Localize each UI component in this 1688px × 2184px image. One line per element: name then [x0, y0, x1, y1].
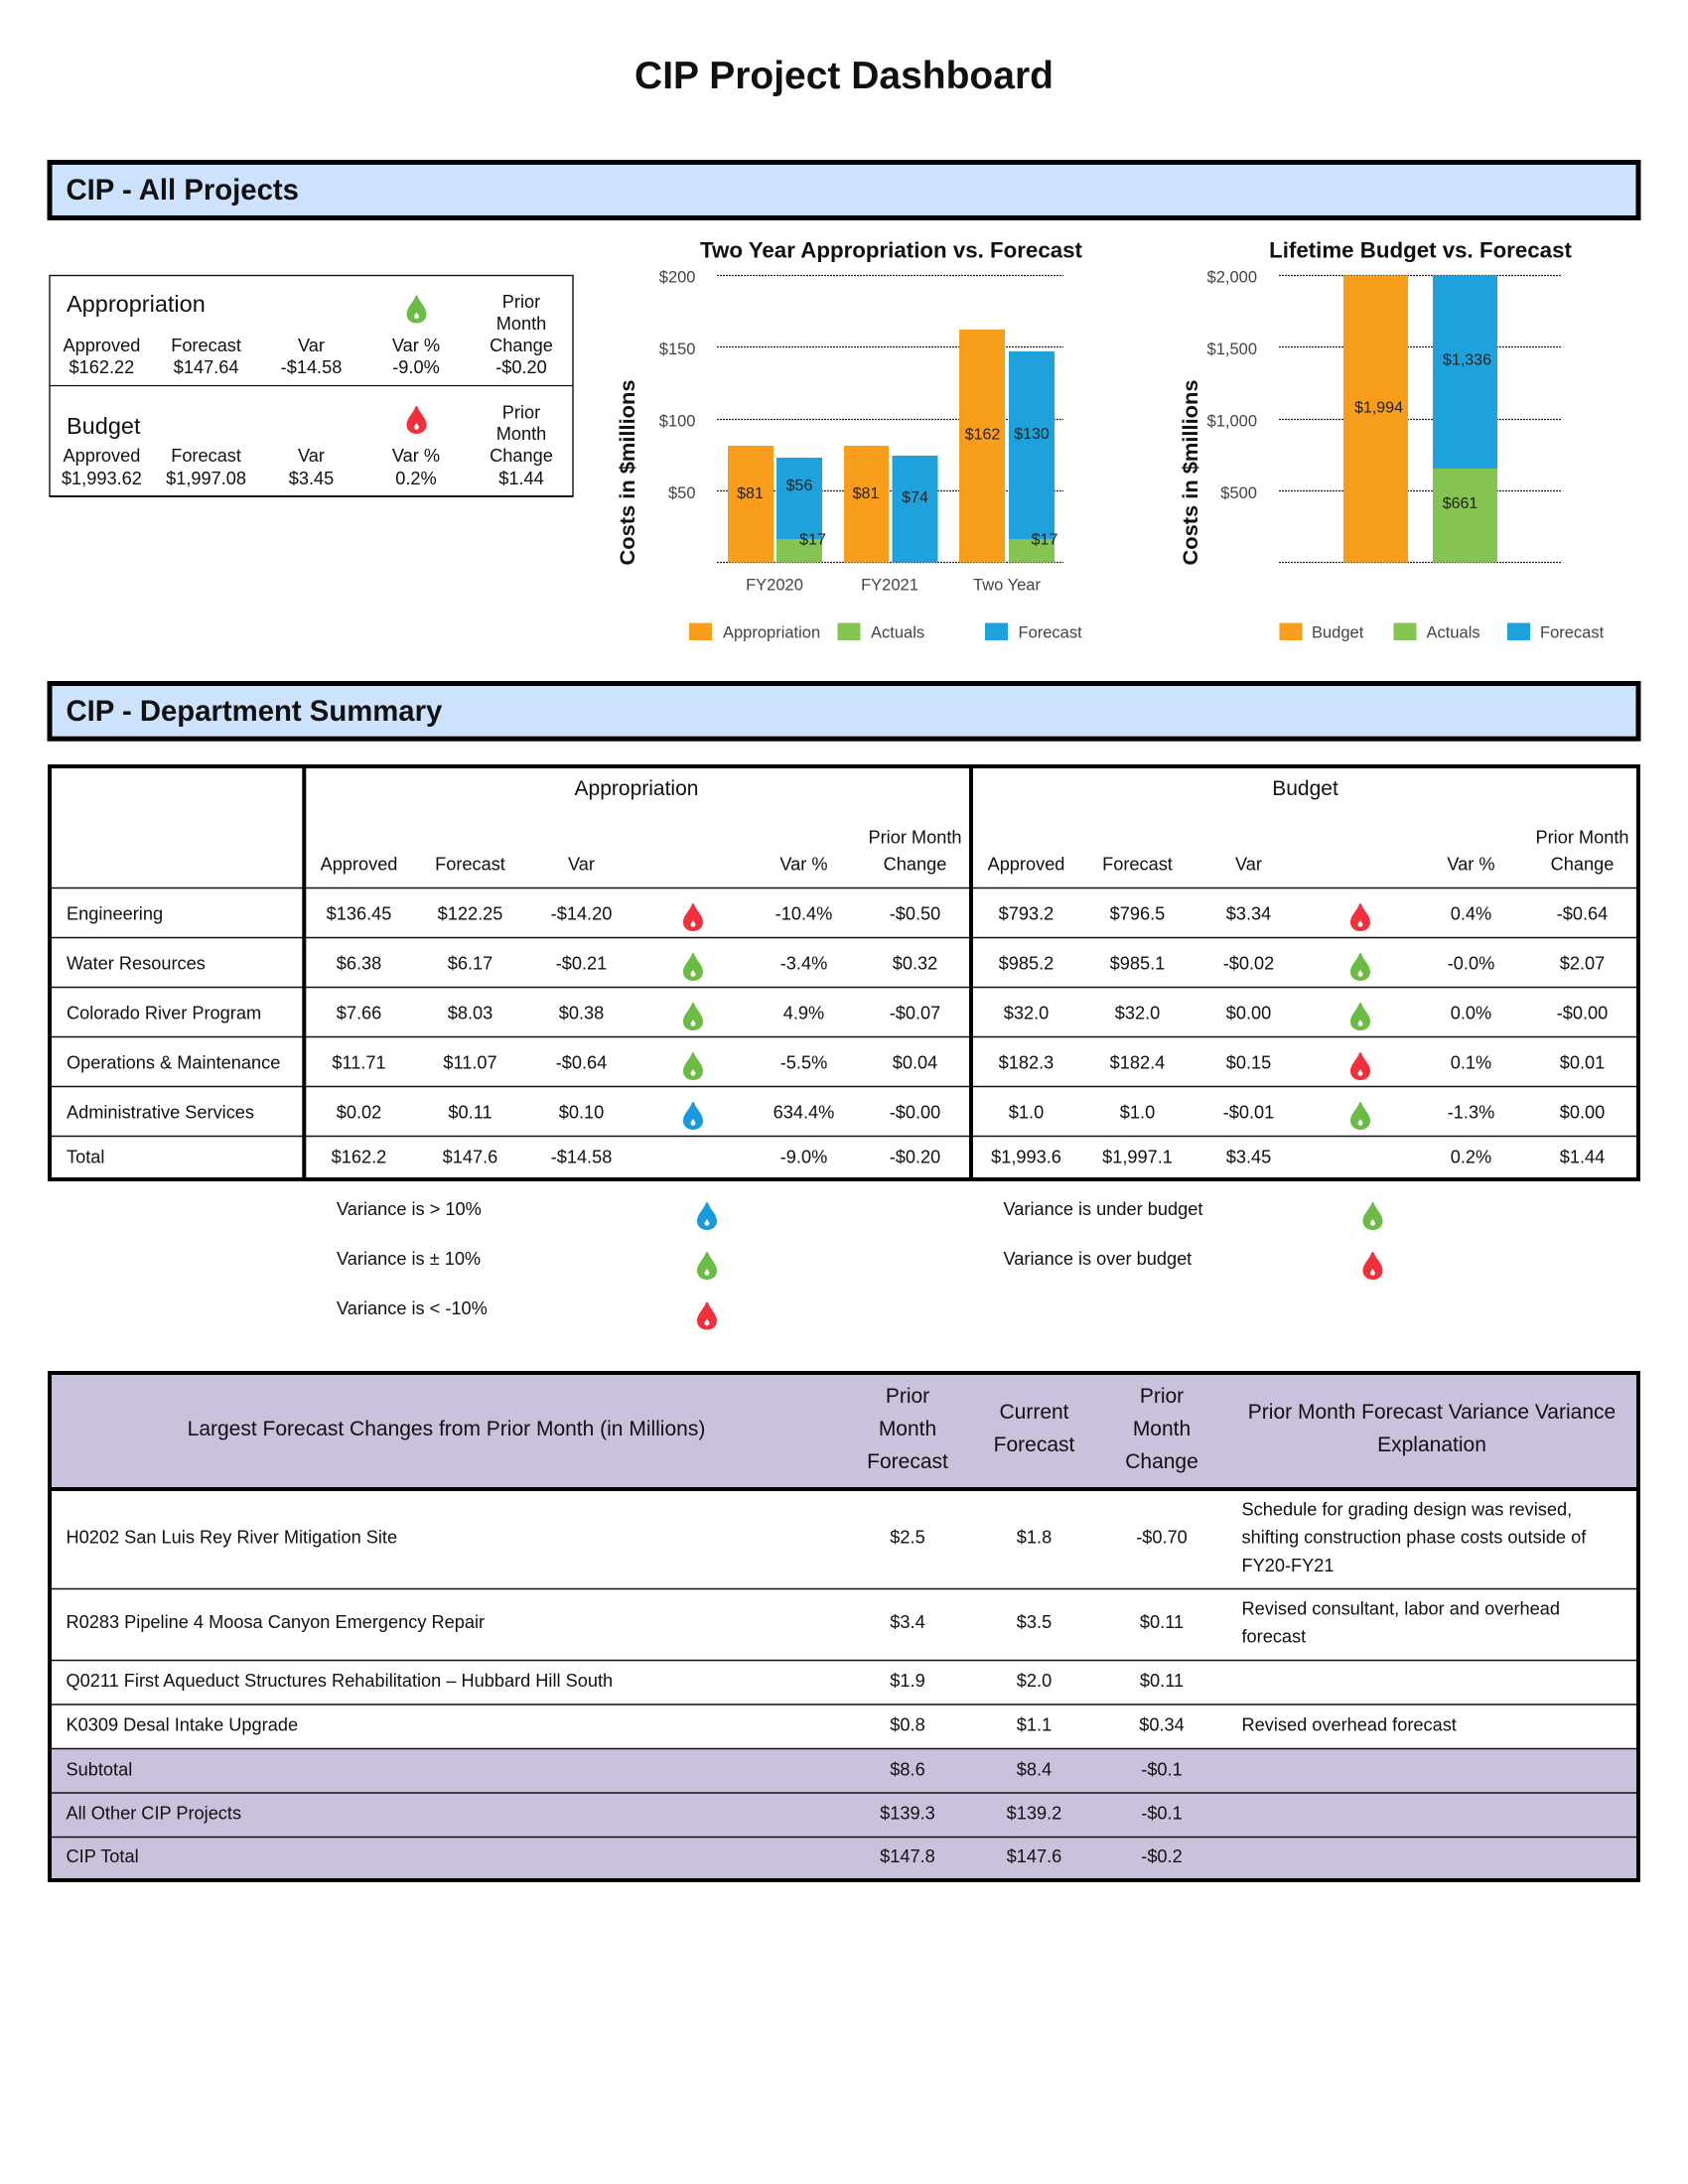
row: Engineering: Engineering [67, 903, 163, 923]
row: Administrative Services: $0.10 [559, 1102, 604, 1122]
table header: Budget [1272, 777, 1338, 800]
row: Colorado River Program: 4.9% [783, 1003, 824, 1023]
table header: Prior [886, 1385, 929, 1408]
y axis labels: $150 [659, 341, 695, 358]
row: Water Resources [67, 953, 1605, 981]
bar value labels: $56 [786, 478, 812, 494]
row: Water Resources: Water Resources [67, 953, 206, 973]
row: Colorado River Program: 0.0% [1451, 1003, 1491, 1023]
appropriation metrics: -9.0% [392, 357, 440, 377]
row: Water Resources: $985.2 [999, 953, 1054, 973]
panel: largest forecast changes table [50, 1373, 1638, 1880]
row: H0202: shifting construction phase costs outside of [1241, 1527, 1587, 1547]
table header: Month [879, 1418, 936, 1440]
bar value labels: $130 [1014, 426, 1050, 443]
row: Total: -9.0% [780, 1148, 827, 1167]
row: All Other CIP Projects: -$0.1 [1141, 1803, 1183, 1823]
budget metrics: $3.45 [289, 469, 334, 488]
row: Subtotal: $8.6 [890, 1759, 925, 1779]
chart: two year appropriation vs. forecast [617, 238, 1083, 642]
row: Total: $1,997.1 [1102, 1148, 1173, 1167]
chart legend: Forecast [1019, 624, 1082, 642]
row: Subtotal [66, 1759, 1183, 1779]
row: Total: 0.2% [1451, 1148, 1491, 1167]
budget metrics: $1.44 [498, 469, 544, 488]
row: Administrative Services: 634.4% [774, 1102, 834, 1122]
table header: Change [1551, 854, 1614, 874]
row: Operations & Maintenance [67, 1052, 1605, 1080]
row: Water Resources: -0.0% [1448, 953, 1494, 973]
table header: Explanation [1377, 1433, 1486, 1456]
row: H0202: -$0.70 [1136, 1527, 1188, 1547]
row: CIP Total: -$0.2 [1141, 1846, 1183, 1866]
bar value labels: $81 [853, 485, 879, 502]
bar: forecast and actuals [1433, 276, 1497, 562]
appropriation metrics: Month [496, 314, 546, 334]
row: H0202: $1.8 [1017, 1527, 1052, 1547]
table header: Forecast [1102, 854, 1173, 874]
row: Operations & Maintenance: -$0.64 [556, 1052, 607, 1072]
row: Subtotal: $8.4 [1017, 1759, 1052, 1779]
appropriation metrics: -$14.58 [281, 357, 342, 377]
row: K0309: $0.8 [890, 1715, 925, 1735]
row: All Other CIP Projects [66, 1803, 1183, 1823]
budget metrics: $1,997.08 [166, 469, 246, 488]
row: K0309 [66, 1715, 1457, 1735]
bars: FY2021 [844, 446, 937, 562]
row: CIP Total [66, 1846, 1183, 1866]
row: Colorado River Program: $32.0 [1004, 1003, 1049, 1023]
budget heading: Budget [67, 413, 141, 439]
row: Operations & Maintenance: 0.1% [1451, 1052, 1491, 1072]
appropriation metrics: Change [490, 336, 553, 355]
row: Colorado River Program: -$0.00 [1557, 1003, 1608, 1023]
budget metrics: 0.2% [395, 469, 437, 488]
row: Total: $1.44 [1560, 1148, 1605, 1167]
appropriation heading: Appropriation [67, 291, 206, 317]
row: K0309: $1.1 [1017, 1715, 1052, 1735]
appropriation metrics [63, 292, 553, 377]
row: R0283: Revised consultant, labor and overhead [1241, 1598, 1560, 1618]
row: R0283 [66, 1598, 1560, 1646]
table header: Forecast [435, 854, 505, 874]
row: Colorado River Program: $32.0 [1115, 1003, 1160, 1023]
table header: Forecast [867, 1450, 948, 1473]
row: Engineering [67, 903, 1608, 931]
row: Total: $147.6 [443, 1148, 497, 1167]
table header: Largest Forecast Changes from Prior Month (in Millions) [188, 1418, 705, 1440]
row: CIP Total: CIP Total [66, 1846, 139, 1866]
y axis labels: $500 [1220, 484, 1257, 502]
legend: appropriation variance: Variance is > 10% [337, 1199, 482, 1219]
row: Colorado River Program: $8.03 [448, 1003, 492, 1023]
y axis labels: $1,500 [1207, 341, 1257, 358]
row: Total: -$14.58 [551, 1148, 612, 1167]
row: Administrative Services: $1.0 [1120, 1102, 1155, 1122]
panel: department summary table [50, 766, 1638, 1179]
row: Q0211 [66, 1671, 1184, 1691]
row: Operations & Maintenance: Operations & Maintenance [67, 1052, 280, 1072]
chart legend [1279, 623, 1605, 642]
chart legend: Appropriation [723, 624, 820, 642]
row: H0202: Schedule for grading design was revised, [1241, 1499, 1572, 1519]
bar value labels: $162 [965, 427, 1000, 444]
row: CIP Total: $147.8 [880, 1846, 935, 1866]
row: Administrative Services: -$0.01 [1223, 1102, 1274, 1122]
row: Administrative Services: -$0.00 [890, 1102, 940, 1122]
x axis labels: FY2021 [861, 576, 918, 594]
row: R0283: forecast [1241, 1626, 1306, 1646]
row: H0202 [66, 1499, 1587, 1575]
budget metrics: Var % [392, 446, 440, 466]
table header: Var [1235, 854, 1262, 874]
row: Engineering: 0.4% [1451, 903, 1491, 923]
row: Total: $162.2 [332, 1148, 386, 1167]
appropriation metrics: Prior [502, 292, 540, 312]
x axis labels: FY2020 [746, 576, 803, 594]
y axis labels [1207, 269, 1257, 502]
row: Operations & Maintenance: $182.4 [1110, 1052, 1165, 1072]
budget metrics: $1,993.62 [62, 469, 142, 488]
budget metrics [62, 403, 553, 488]
budget metrics: Approved [63, 446, 140, 466]
row: Water Resources: $0.32 [893, 953, 937, 973]
legend: appropriation variance: Variance is ± 10% [337, 1249, 481, 1269]
appropriation metrics: Forecast [171, 336, 241, 355]
row: Operations & Maintenance: $0.01 [1560, 1052, 1605, 1072]
budget metrics: Month [496, 424, 546, 444]
bar value labels: $74 [902, 489, 928, 506]
row: CIP Total: $147.6 [1007, 1846, 1061, 1866]
bars: FY2020 [728, 446, 822, 562]
section banner: CIP - All Projects [50, 163, 1638, 218]
y axis labels [659, 269, 695, 502]
row: Water Resources: $6.38 [337, 953, 381, 973]
table header: Approved [321, 854, 397, 874]
row: H0202: FY20-FY21 [1241, 1556, 1335, 1575]
row: Colorado River Program: $7.66 [337, 1003, 381, 1023]
appropriation metrics: Var % [392, 336, 440, 355]
panel: appropriation and budget summary [50, 276, 573, 496]
row: Operations & Maintenance: $11.07 [443, 1052, 497, 1072]
table header: Prior Month Forecast Variance Variance [1248, 1401, 1616, 1424]
row: Engineering: $122.25 [438, 903, 502, 923]
row: R0283: $3.4 [890, 1612, 925, 1632]
y axis title: Costs in $millions [1180, 379, 1202, 566]
row: Engineering: -$0.64 [1557, 903, 1608, 923]
legend: budget variance: Variance is under budget [1003, 1199, 1202, 1219]
row: R0283: R0283 Pipeline 4 Moosa Canyon Emergency Repair [66, 1612, 485, 1632]
section banner: CIP - All Projects: CIP - All Projects [66, 174, 299, 206]
table header: Appropriation [575, 777, 698, 800]
row: Total: $1,993.6 [991, 1148, 1061, 1167]
y axis labels: $2,000 [1207, 269, 1257, 287]
table header: Approved [988, 854, 1064, 874]
row: Engineering: -10.4% [775, 903, 832, 923]
legend: appropriation variance: Variance is < -10% [337, 1298, 488, 1318]
row: Engineering: $796.5 [1110, 903, 1165, 923]
row: Operations & Maintenance: $0.04 [893, 1052, 937, 1072]
row: Engineering: -$0.50 [890, 903, 940, 923]
chart legend: Forecast [1540, 624, 1605, 642]
bar value labels: $661 [1443, 495, 1477, 512]
budget metrics: Forecast [171, 446, 241, 466]
budget metrics: Change [490, 446, 553, 466]
row: Total: -$0.20 [890, 1148, 940, 1167]
table header [188, 1385, 1616, 1473]
table header: Var [568, 854, 595, 874]
bar value labels [737, 426, 1057, 548]
chart legend: Budget [1312, 624, 1364, 642]
appropriation metrics: Var [298, 336, 325, 355]
row: Subtotal: -$0.1 [1141, 1759, 1183, 1779]
chart title: Lifetime Budget vs. Forecast [1269, 238, 1572, 262]
budget metrics: Prior [502, 403, 540, 423]
bar value labels: $1,336 [1443, 351, 1491, 368]
table header: Forecast [994, 1433, 1075, 1456]
table header: Var % [779, 854, 828, 874]
row: Administrative Services [67, 1102, 1605, 1130]
row: All Other CIP Projects: $139.3 [880, 1803, 935, 1823]
section banner: CIP - Department Summary: CIP - Department Summary [66, 695, 443, 728]
table header: Prior [1140, 1385, 1184, 1408]
row: Operations & Maintenance: $0.15 [1226, 1052, 1271, 1072]
row: Colorado River Program: -$0.07 [890, 1003, 940, 1023]
bar value labels: $81 [737, 485, 764, 502]
bar value labels: $1,994 [1354, 400, 1403, 417]
row: Water Resources: $2.07 [1560, 953, 1605, 973]
row: Operations & Maintenance: -5.5% [780, 1052, 827, 1072]
row: Engineering: $793.2 [999, 903, 1054, 923]
row: Operations & Maintenance: $182.3 [999, 1052, 1054, 1072]
chart legend: Actuals [1426, 624, 1480, 642]
row: Q0211: $0.11 [1140, 1671, 1184, 1691]
appropriation metrics: -$0.20 [495, 357, 547, 377]
y axis title: Costs in $millions [617, 379, 639, 566]
row: Water Resources: -3.4% [780, 953, 827, 973]
row: Colorado River Program: Colorado River Program [67, 1003, 261, 1023]
row: Administrative Services: $0.02 [337, 1102, 381, 1122]
title: CIP Project Dashboard [634, 55, 1054, 97]
bar: budget [1343, 276, 1408, 562]
row: Water Resources: $985.1 [1110, 953, 1165, 973]
y axis labels: $1,000 [1207, 412, 1257, 430]
table header: Prior Month [868, 828, 962, 848]
row: Water Resources: -$0.02 [1223, 953, 1274, 973]
row: Water Resources: -$0.21 [556, 953, 607, 973]
legend: budget variance: Variance is over budget [1003, 1249, 1192, 1269]
row: Engineering: $136.45 [327, 903, 391, 923]
bar value labels: $17 [799, 531, 826, 548]
row: Administrative Services: Administrative Services [67, 1102, 254, 1122]
row: H0202: H0202 San Luis Rey River Mitigation Site [66, 1527, 397, 1547]
row: Colorado River Program: $0.00 [1226, 1003, 1271, 1023]
row: Subtotal: Subtotal [66, 1759, 132, 1779]
row: Q0211: Q0211 First Aqueduct Structures Rehabilitation – Hubbard Hill South [66, 1671, 613, 1691]
chart legend: Actuals [871, 624, 924, 642]
row: Administrative Services: $1.0 [1009, 1102, 1044, 1122]
row: Water Resources: $6.17 [448, 953, 492, 973]
row: Administrative Services: $0.11 [448, 1102, 492, 1122]
row: R0283: $3.5 [1017, 1612, 1052, 1632]
chart legend [689, 623, 1082, 642]
row: K0309: K0309 Desal Intake Upgrade [66, 1715, 298, 1735]
row: All Other CIP Projects: All Other CIP Projects [66, 1803, 241, 1823]
row: Colorado River Program: $0.38 [559, 1003, 604, 1023]
row: Administrative Services: $0.00 [1560, 1102, 1605, 1122]
table header: Change [1125, 1450, 1198, 1473]
budget metrics: Var [298, 446, 325, 466]
row: K0309: Revised overhead forecast [1241, 1715, 1457, 1735]
table header [321, 777, 1629, 874]
row: Total: Total [67, 1148, 104, 1167]
appropriation metrics: $162.22 [70, 357, 134, 377]
bars: Two Year [959, 330, 1055, 562]
y axis labels: $100 [659, 412, 695, 430]
bar value labels [1354, 351, 1491, 512]
row: All Other CIP Projects: $139.2 [1007, 1803, 1061, 1823]
y axis labels: $50 [668, 484, 695, 502]
bar value labels: $17 [1032, 531, 1057, 548]
table header: Change [884, 854, 946, 874]
icon: green drop [407, 296, 427, 324]
table header: Var % [1447, 854, 1495, 874]
row: R0283: $0.11 [1140, 1612, 1184, 1632]
row: H0202: $2.5 [890, 1527, 925, 1547]
y axis labels: $200 [659, 269, 695, 287]
appropriation metrics: Approved [63, 336, 140, 355]
section banner: CIP - Department Summary [50, 683, 1638, 739]
x axis labels: Two Year [973, 576, 1041, 594]
row: K0309: $0.34 [1139, 1715, 1185, 1735]
row: Q0211: $2.0 [1017, 1671, 1052, 1691]
chart: lifetime budget vs. forecast [1180, 238, 1605, 642]
row: Administrative Services: -1.3% [1448, 1102, 1494, 1122]
appropriation metrics: $147.64 [174, 357, 238, 377]
row: Colorado River Program [67, 1003, 1608, 1030]
table header: Month [1133, 1418, 1191, 1440]
x axis labels [746, 576, 1041, 594]
table header: Prior Month [1535, 828, 1629, 848]
row: Engineering: -$14.20 [551, 903, 612, 923]
icon: red drop [407, 406, 427, 434]
row: Engineering: $3.34 [1226, 903, 1271, 923]
table header: Current [999, 1401, 1069, 1424]
legend: appropriation variance [337, 1199, 717, 1330]
row: Q0211: $1.9 [890, 1671, 925, 1691]
row: Total: $3.45 [1226, 1148, 1271, 1167]
row: Operations & Maintenance: $11.71 [332, 1052, 386, 1072]
chart title: Two Year Appropriation vs. Forecast [700, 238, 1083, 262]
legend: budget variance [1003, 1199, 1382, 1280]
row: Total [67, 1148, 1605, 1167]
